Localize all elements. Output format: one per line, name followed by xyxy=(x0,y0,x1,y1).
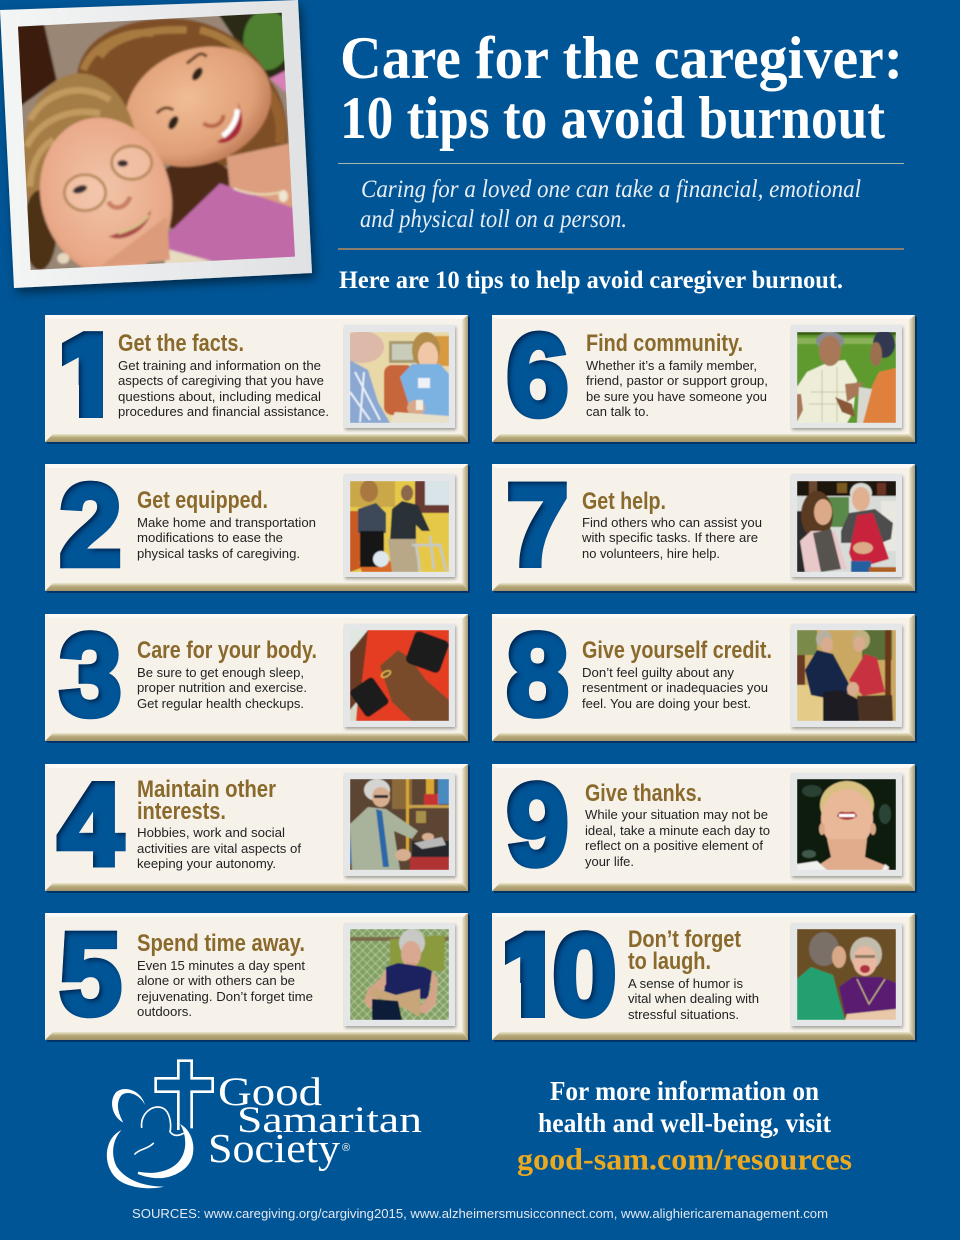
body text: with specific tasks. If there are xyxy=(581,530,758,545)
body text: questions about, including medical xyxy=(118,389,321,404)
panel: tip 1 xyxy=(45,310,470,444)
body text: physical tasks of caregiving. xyxy=(137,546,300,561)
call to action: For more information on xyxy=(550,1076,819,1106)
body text: vital when dealing with xyxy=(628,991,759,1006)
panel: tip 5 xyxy=(45,909,470,1042)
body text: stressful situations. xyxy=(628,1007,739,1022)
body text: Even 15 minutes a day spent xyxy=(137,958,305,973)
photo: couple on sofa xyxy=(791,624,902,727)
body text: rejuvenating. Don’t forget time xyxy=(137,989,313,1004)
number 9: 9 xyxy=(506,760,568,890)
number 10: 0 xyxy=(552,910,616,1040)
body text: Hobbies, work and social xyxy=(137,825,285,840)
panel: tip 10: to laugh. xyxy=(628,948,711,975)
body text xyxy=(137,515,316,561)
number 6: 6 xyxy=(506,310,568,440)
logo wordmark xyxy=(208,1069,422,1171)
heading: Don’t forget xyxy=(628,926,741,953)
photo: woman reading in hammock xyxy=(344,923,455,1026)
logo mark xyxy=(107,1061,213,1188)
body text: proper nutrition and exercise. xyxy=(137,680,307,695)
logo: Good Samaritan Society xyxy=(107,1061,422,1188)
photo: man in workshop xyxy=(344,773,455,876)
panel: tip 9 xyxy=(492,760,917,893)
body text: aspects of caregiving that you have xyxy=(118,373,324,388)
subheading: Here are 10 tips to help avoid caregiver burnout. xyxy=(339,267,843,294)
heading: Get equipped. xyxy=(137,487,268,514)
body text xyxy=(582,665,768,711)
number 8: 8 xyxy=(506,610,568,740)
heading: Get help. xyxy=(582,488,666,515)
number 2: 2 xyxy=(60,460,122,590)
photo: woman looking up xyxy=(791,773,902,876)
number 3: 3 xyxy=(60,610,122,740)
body text: Get training and information on the xyxy=(118,358,321,373)
body text: Be sure to get enough sleep, xyxy=(137,665,304,680)
logo wordmark: Samaritan xyxy=(237,1100,422,1141)
body text: ideal, take a minute each day to xyxy=(585,823,770,838)
heading: Maintain other xyxy=(137,776,276,803)
body text: activities are vital aspects of xyxy=(137,841,301,856)
panel: tip 4 xyxy=(45,760,470,893)
body text: A sense of humor is xyxy=(628,976,744,991)
body text xyxy=(118,358,329,419)
intro text xyxy=(360,176,861,233)
body text: no volunteers, hire help. xyxy=(582,546,720,561)
body text xyxy=(137,958,313,1019)
body text xyxy=(586,358,768,419)
photo: two men talking outdoors xyxy=(791,325,902,428)
panel: tip 7 xyxy=(492,460,917,593)
logo wordmark: ® xyxy=(342,1142,350,1154)
number 1: 1 xyxy=(52,310,128,440)
body text: modifications to ease the xyxy=(137,530,283,545)
body text xyxy=(581,515,762,561)
body text: friend, pastor or support group, xyxy=(586,373,768,388)
body text: Don’t feel guilty about any xyxy=(582,665,734,680)
panel: tip 8 xyxy=(492,610,917,743)
sources: SOURCES: www.caregiving.org/cargiving2015, www.alzheimersmusicconnect.com, www.alighiericaremanagement.com xyxy=(132,1206,828,1221)
photo: walker assistance xyxy=(344,474,455,577)
number 10: 1 xyxy=(494,910,569,1040)
call to action: health and well-being, visit xyxy=(538,1108,831,1138)
body text xyxy=(585,807,770,869)
title xyxy=(340,25,903,151)
photo: hand with dumbbell xyxy=(344,624,455,727)
number 5: 5 xyxy=(60,909,122,1039)
panel: tip 2 xyxy=(45,460,470,593)
heading: Spend time away. xyxy=(137,930,305,957)
title: 10 tips to avoid burnout xyxy=(340,85,885,151)
body text xyxy=(628,976,759,1022)
logo wordmark: Good xyxy=(218,1069,322,1114)
website link: good-sam.com/resources xyxy=(517,1142,852,1176)
body text: outdoors. xyxy=(137,1004,192,1019)
logo wordmark: Society xyxy=(208,1125,341,1171)
body text: Make home and transportation xyxy=(137,515,316,530)
heading: Care for your body. xyxy=(137,637,317,664)
photo: cooking together xyxy=(791,474,902,577)
top rule xyxy=(338,163,904,164)
number 10 xyxy=(505,930,615,1019)
body text xyxy=(137,825,301,871)
heading: Give yourself credit. xyxy=(582,637,772,664)
number 4: 4 xyxy=(58,760,123,890)
body text: feel. You are doing your best. xyxy=(582,696,751,711)
body text: Get regular health checkups. xyxy=(137,696,304,711)
panel: tip 4: interests. xyxy=(137,798,226,825)
body text: Find others who can assist you xyxy=(582,515,762,530)
panel: tip 10 xyxy=(492,910,917,1042)
body text xyxy=(137,665,307,711)
body text: procedures and financial assistance. xyxy=(118,404,329,419)
panel: tip 6 xyxy=(492,310,917,444)
photo: man with caregiver xyxy=(340,325,455,428)
heading: Get the facts. xyxy=(118,330,244,357)
body text: resentment or inadequacies you xyxy=(582,680,768,695)
body text: can talk to. xyxy=(586,404,649,419)
panel: tip 3 xyxy=(45,610,470,743)
body text: Whether it’s a family member, xyxy=(586,358,757,373)
title: Care for the caregiver: xyxy=(340,25,903,91)
intro text: and physical toll on a person. xyxy=(360,206,627,233)
intro text: Caring for a loved one can take a financial, emotional xyxy=(361,176,861,203)
hero photo in tilted frame xyxy=(0,0,330,300)
body text: While your situation may not be xyxy=(585,807,768,822)
body text: be sure you have someone you xyxy=(586,389,767,404)
heading: Find community. xyxy=(586,330,743,357)
body text: your life. xyxy=(585,854,634,869)
body text: keeping your autonomy. xyxy=(137,856,276,871)
body text: alone or with others can be xyxy=(137,973,295,988)
heading: Give thanks. xyxy=(585,780,702,807)
lower rule xyxy=(338,248,904,250)
call to action xyxy=(517,1076,852,1176)
photo: two women laughing xyxy=(791,923,902,1026)
number 7: 7 xyxy=(506,460,568,590)
body text: reflect on a positive element of xyxy=(585,838,763,853)
